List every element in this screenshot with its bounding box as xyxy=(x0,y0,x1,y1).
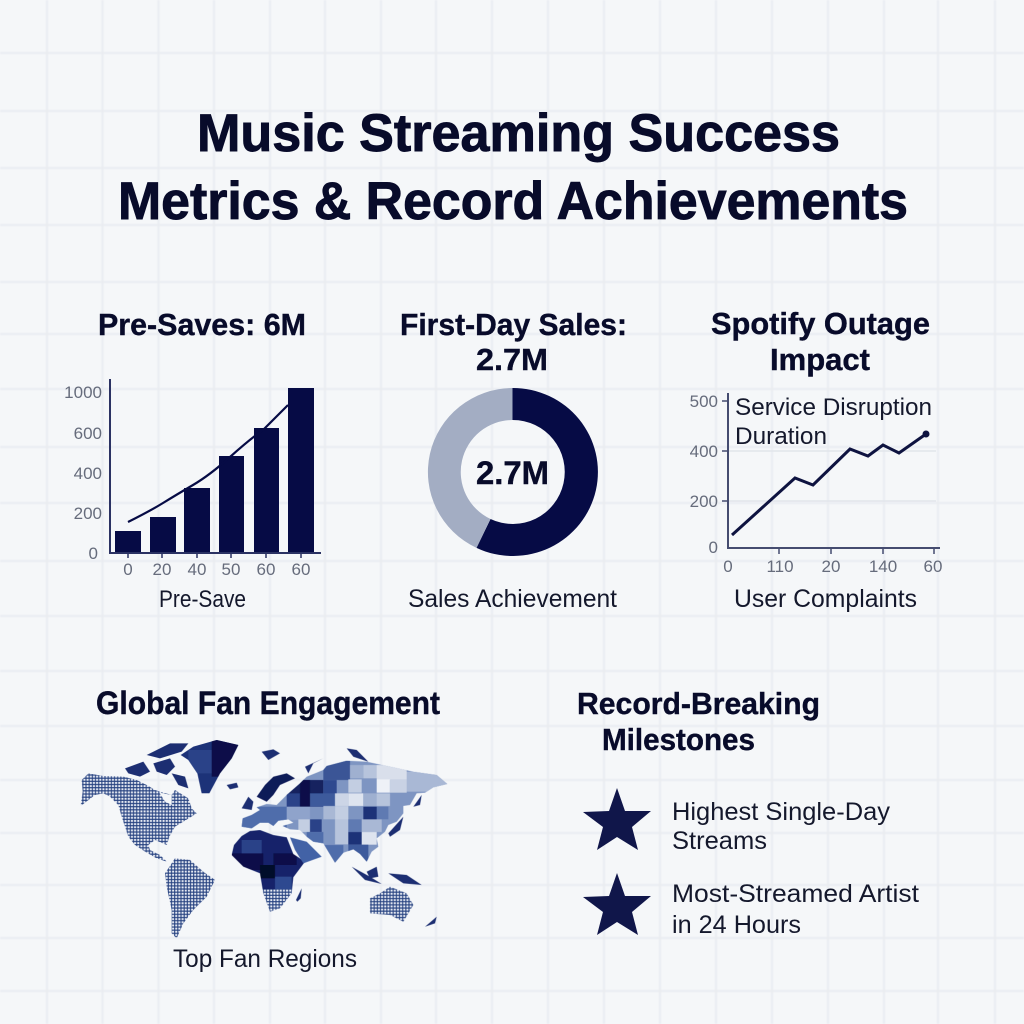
donut chart: 2.7M xyxy=(476,455,549,491)
bar chart: pre-saves: 50 xyxy=(222,560,240,579)
africa xyxy=(232,830,304,912)
chart annotation: Duration xyxy=(735,423,827,450)
bar chart: pre-saves: 20 xyxy=(153,560,171,579)
caption: pre-save: Pre-Save xyxy=(159,586,246,613)
scandinavia xyxy=(257,773,295,802)
caption: sales achievement: Sales Achievement xyxy=(408,585,617,613)
bar chart: pre-saves: 400 xyxy=(74,464,102,483)
line chart: outage: 400 xyxy=(690,442,718,461)
panel: global fan engagement xyxy=(81,685,450,973)
milestone text 1: Highest Single-Day xyxy=(672,798,890,826)
heading: first-day sales: First-Day Sales: xyxy=(400,307,627,342)
line chart: outage: 60 xyxy=(924,557,942,576)
north america xyxy=(81,773,197,862)
caption: top fan regions: Top Fan Regions xyxy=(173,945,357,973)
heading: spotify outage xyxy=(711,306,930,377)
greenland xyxy=(180,738,240,795)
line chart: outage: 110 xyxy=(766,557,794,576)
panel: first-day sales xyxy=(400,307,627,613)
milestone text 1: Streams xyxy=(672,827,767,855)
caption: user complaints: User Complaints xyxy=(734,585,917,613)
eurasia xyxy=(240,758,450,865)
heading: first-day sales xyxy=(400,307,627,377)
arabia xyxy=(290,837,322,863)
title xyxy=(118,104,908,231)
title: Music Streaming Success xyxy=(197,104,840,163)
bar chart: pre-saves: 0 xyxy=(123,560,133,579)
world map xyxy=(81,738,450,938)
bar chart: pre-saves: 0 xyxy=(89,544,98,563)
line chart: outage: 200 xyxy=(690,492,718,511)
line chart: outage xyxy=(690,392,942,576)
milestone text 1 xyxy=(672,798,890,855)
line chart: outage: 20 xyxy=(822,557,840,576)
icon: star 2 xyxy=(583,873,651,935)
milestone text 2: Most-Streamed Artist xyxy=(672,880,919,908)
heading: pre-saves: Pre-Saves: 6M xyxy=(98,307,306,342)
bar chart: pre-saves: 1000 xyxy=(64,383,102,402)
heading: first-day sales: 2.7M xyxy=(476,342,548,377)
heading: milestones: Record-Breaking xyxy=(577,686,820,721)
line chart: outage: 0 xyxy=(723,557,733,576)
line chart: outage: 140 xyxy=(869,557,897,576)
south america xyxy=(165,858,215,938)
bar chart: pre-saves: 200 xyxy=(74,504,102,523)
australia xyxy=(370,887,413,922)
bar chart: pre-saves xyxy=(64,379,321,579)
panel: pre-saves xyxy=(64,307,321,613)
heading: spotify outage: Spotify Outage xyxy=(711,306,930,341)
heading: milestones: Milestones xyxy=(602,722,755,757)
panel: spotify outage xyxy=(690,306,942,613)
line chart: outage: 500 xyxy=(690,392,718,411)
arctic islands xyxy=(125,743,188,788)
bar chart: pre-saves: 60 xyxy=(257,560,275,579)
milestone text 2 xyxy=(672,880,919,939)
panel: record-breaking milestones xyxy=(577,686,919,939)
donut chart xyxy=(428,388,598,556)
bar chart: pre-saves: 60 xyxy=(292,560,310,579)
title: Metrics & Record Achievements xyxy=(118,172,908,231)
bar chart: pre-saves: 40 xyxy=(188,560,206,579)
bar chart: pre-saves: 600 xyxy=(74,424,102,443)
icon: star 1 xyxy=(583,788,651,850)
islands xyxy=(227,748,437,927)
chart annotation xyxy=(735,394,932,450)
hudson bay xyxy=(159,793,172,805)
milestone text 2: in 24 Hours xyxy=(672,911,801,939)
heading: global fan engagement: Global Fan Engagement xyxy=(96,685,440,721)
heading: spotify outage: Impact xyxy=(770,342,870,377)
line chart: outage: 0 xyxy=(709,538,718,557)
heading: milestones xyxy=(577,686,820,757)
chart annotation: Service Disruption xyxy=(735,394,932,421)
